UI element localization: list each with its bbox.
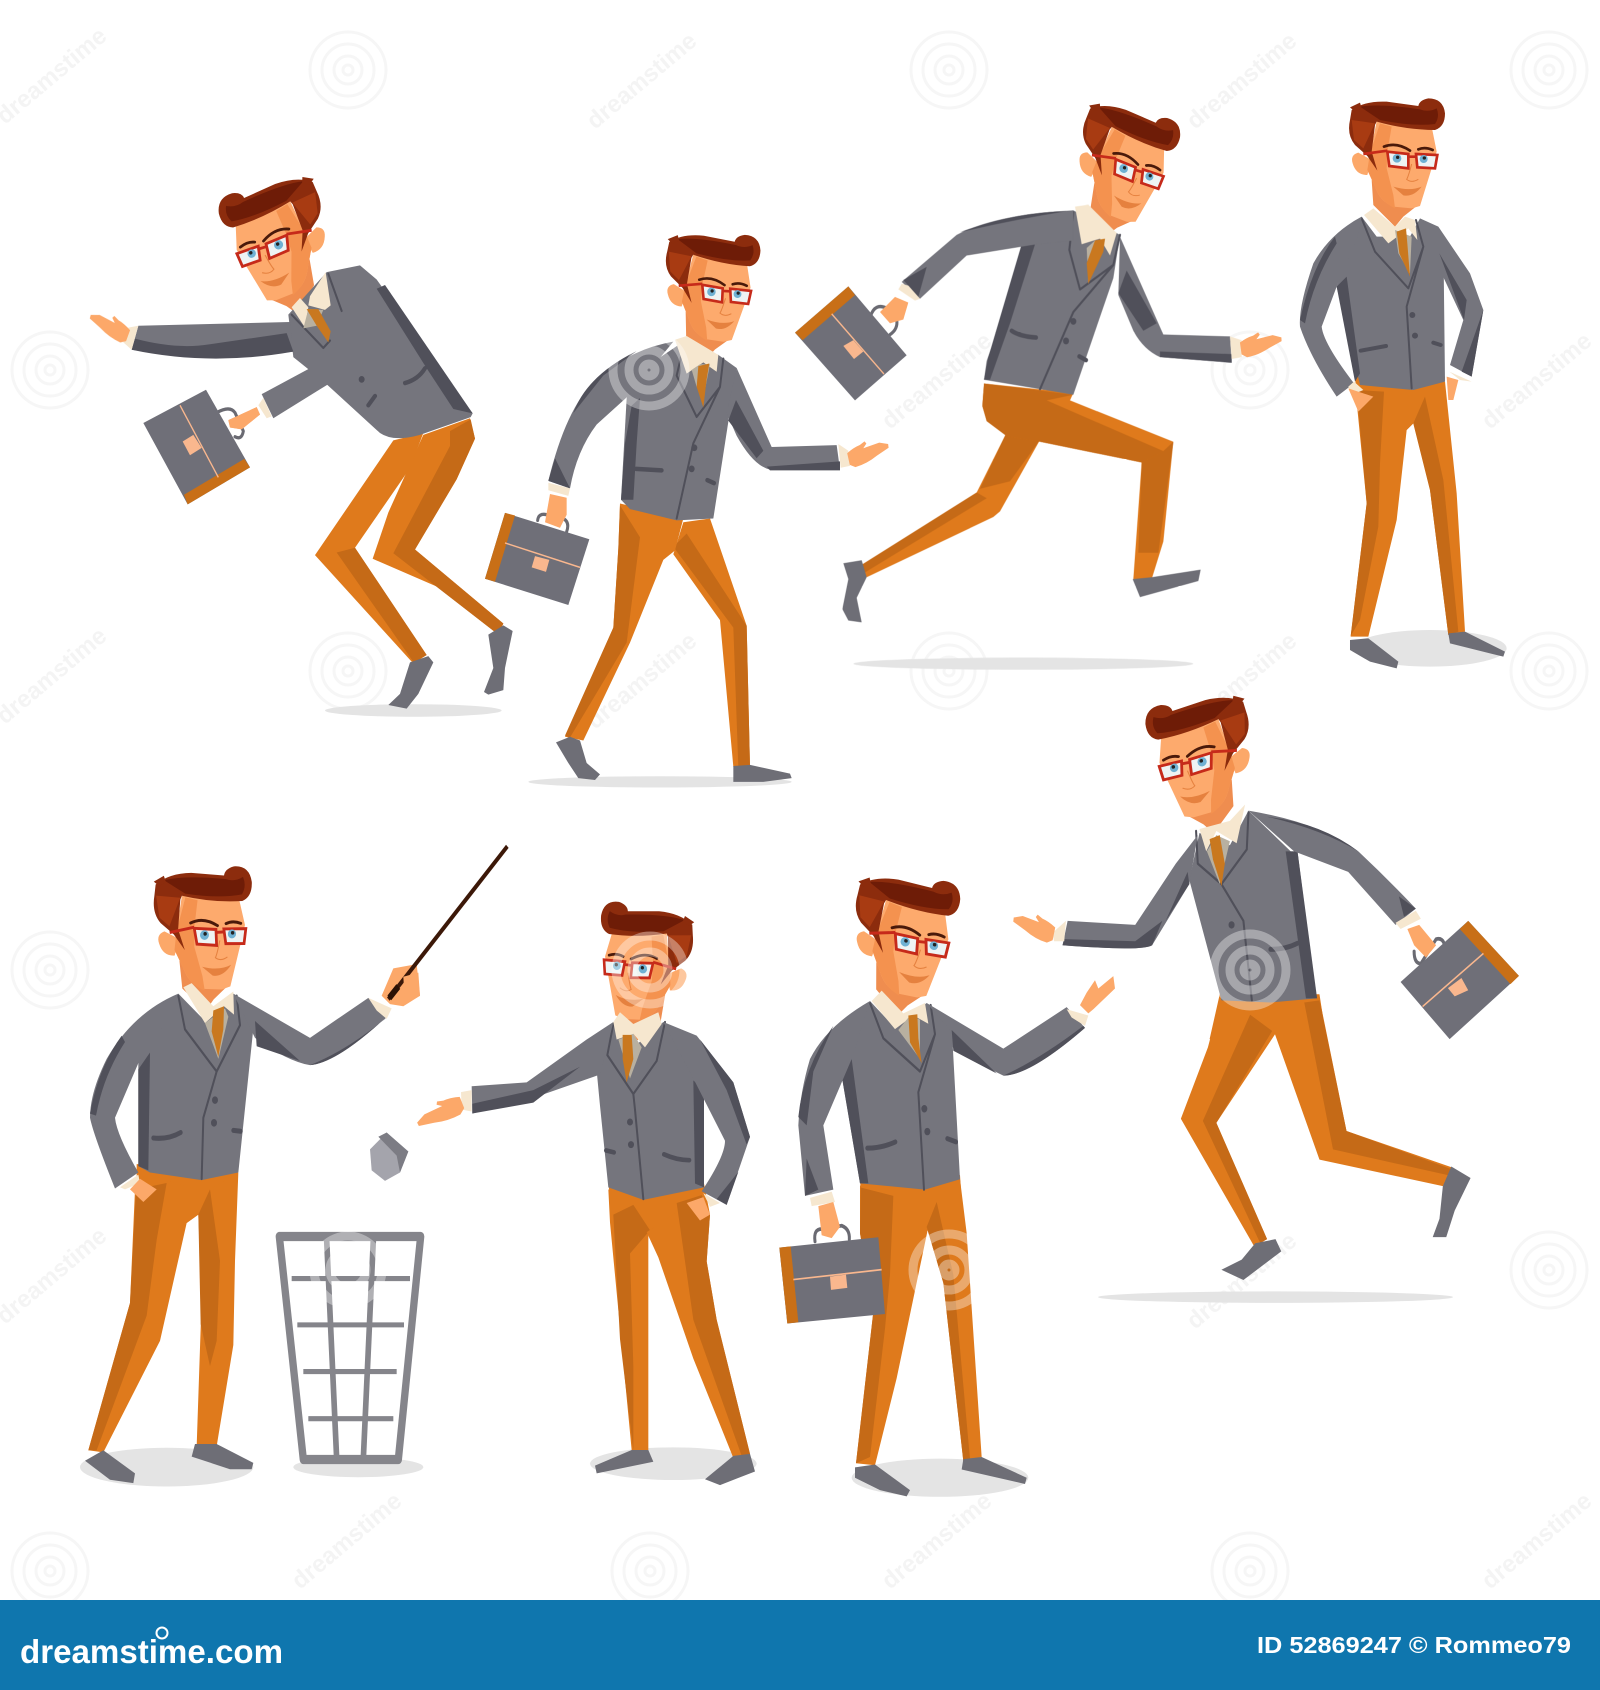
briefcase [485, 494, 589, 605]
jacket [548, 336, 850, 520]
pants [1351, 377, 1465, 637]
briefcase [1401, 921, 1519, 1039]
head [1349, 98, 1445, 227]
jacket [461, 1012, 750, 1207]
shoes [85, 1444, 253, 1483]
shoes [595, 1450, 755, 1485]
figure 2: walking man with briefcase [485, 230, 891, 787]
head [848, 872, 961, 1021]
image credit: ID 52869247 © Rommeo79 [1257, 1632, 1571, 1658]
figure 5: man with pointer stick [80, 846, 507, 1486]
hands [86, 307, 260, 429]
watermark pattern: dreamstime [287, 1487, 407, 1595]
figure 8: jogging man with briefcase [1011, 689, 1519, 1303]
figure 3: running man with briefcase [795, 96, 1283, 670]
watermark pattern: dreamstime [1477, 1487, 1597, 1595]
jacket [1052, 804, 1421, 1002]
socks [388, 625, 513, 709]
head [1062, 96, 1183, 249]
watermark pattern: dreamstime [1477, 327, 1597, 435]
shoes [1350, 632, 1505, 668]
hand: open [1011, 908, 1057, 944]
briefcase [143, 390, 260, 504]
watermark pattern: dreamstime [1182, 1227, 1302, 1335]
crumpled paper [370, 1133, 408, 1181]
footer banner [0, 1600, 1600, 1690]
head [589, 900, 696, 1047]
hand: open [1239, 328, 1283, 358]
watermark pattern: dreamstime [877, 1487, 997, 1595]
hand: open, dropping [414, 1091, 466, 1135]
pants [565, 503, 750, 767]
watermark pattern: dreamstime [1182, 627, 1302, 735]
waste bin [279, 1236, 423, 1477]
logo: dreamstime.com: dreamstime.com [20, 1633, 283, 1670]
pants [315, 418, 503, 664]
head [215, 169, 344, 329]
briefcase [779, 1202, 885, 1324]
pants [608, 1184, 750, 1458]
hand in pocket [130, 1179, 157, 1202]
head [1143, 689, 1262, 843]
head [661, 230, 761, 362]
figure 1: crouching man with briefcase [86, 169, 513, 717]
shoes [842, 560, 1201, 622]
pants [856, 1175, 982, 1465]
figure 6: man dropping paper [414, 900, 757, 1485]
jacket [798, 991, 1088, 1206]
watermark spirals over figures [314, 334, 1286, 1306]
jacket [1300, 208, 1483, 397]
pointer stick and hand [382, 846, 507, 1006]
watermark pattern: dreamstime [582, 27, 702, 135]
pants [1181, 994, 1453, 1245]
hand in pocket [687, 1197, 710, 1220]
figure 7: standing man with briefcase, arm raised [779, 872, 1115, 1497]
hand: open [846, 435, 891, 469]
hands in pockets [1348, 377, 1458, 412]
jacket [898, 205, 1242, 395]
hand raised [1080, 976, 1115, 1013]
jacket [123, 265, 473, 438]
watermark pattern: dreamstime [1182, 27, 1302, 135]
watermark pattern: dreamstime [877, 327, 997, 435]
pants [88, 1164, 238, 1452]
shoes [855, 1457, 1027, 1496]
head [152, 865, 257, 1014]
pants [860, 383, 1173, 579]
shoes [1221, 1167, 1471, 1280]
shoes [556, 737, 792, 782]
figure 4: standing man, hands in pockets [1300, 98, 1507, 668]
watermark pattern: dreamstime [582, 627, 702, 735]
jacket [90, 983, 392, 1189]
briefcase [795, 286, 908, 400]
